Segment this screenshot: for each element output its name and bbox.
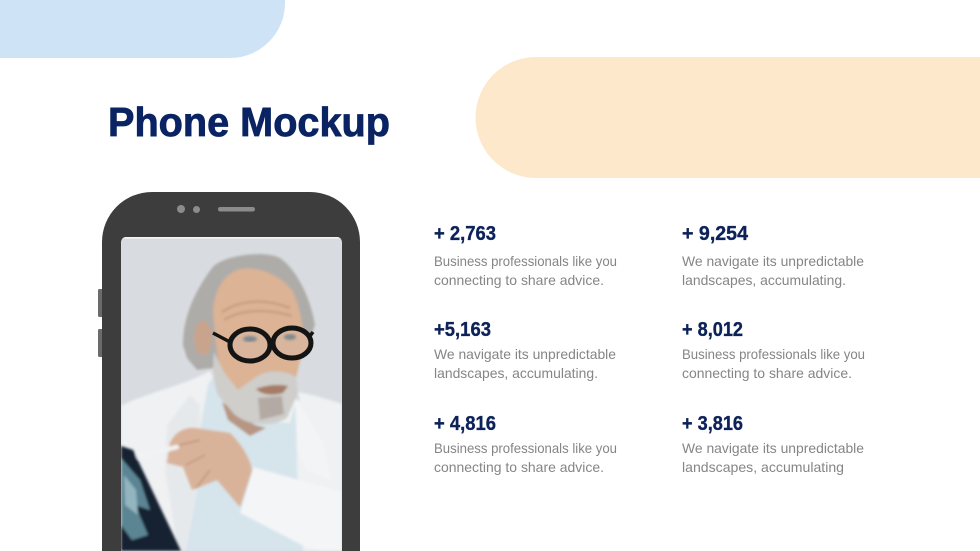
blue corner shape [0,0,285,58]
forehead wrinkles [222,302,292,320]
stat: +9,254: landscapes, accumulating. [682,272,846,288]
stat: +3,816: We navigate its unpredictable [682,440,864,456]
eyes [243,334,296,342]
phone body [102,192,360,551]
x-ray [121,446,181,551]
stat: +8,012: Business professionals like you [682,346,865,362]
stat: +2,763: connecting to share advice. [434,272,604,288]
stat: +4,816: Business professionals like you [434,440,617,456]
stat: +3,816: + 3,816 [682,413,743,435]
stat: +9,254 [682,223,864,288]
hand [167,428,252,507]
stat: +8,012 [682,319,865,381]
stat: +9,254: We navigate its unpredictable [682,253,864,269]
stat: +5,163 [434,319,616,381]
stat: +2,763: + 2,763 [434,223,496,245]
stat: +5,163: +5,163 [434,319,491,341]
stat: +2,763 [434,223,617,288]
ear [194,321,212,355]
phone side buttons [98,289,103,357]
stat: +3,816: landscapes, accumulating [682,459,844,475]
stat: +2,763: Business professionals like you [434,253,617,269]
phone mockup [98,192,360,551]
beard [213,352,298,424]
stat: +4,816: connecting to share advice. [434,459,604,475]
hair [183,254,315,370]
neck [222,402,266,436]
stat: +5,163: landscapes, accumulating. [434,365,598,381]
photo: doctor holding x-ray [121,237,342,551]
peach pill shape [475,57,980,178]
face [213,269,303,398]
title: Phone Mockup [108,99,390,145]
glasses [213,328,313,361]
stat: +3,816 [682,413,864,475]
stat: +5,163: We navigate its unpredictable [434,346,616,362]
stat: +4,816 [434,413,617,475]
phone camera and speaker [177,205,255,213]
stat: +4,816: + 4,816 [434,413,496,435]
pen [125,447,177,460]
sleeve [240,467,304,545]
stat: +8,012: connecting to share advice. [682,365,852,381]
shirt [186,372,303,551]
coat [121,371,342,551]
stat: +8,012: + 8,012 [682,319,743,341]
stat: +9,254: + 9,254 [682,223,749,245]
